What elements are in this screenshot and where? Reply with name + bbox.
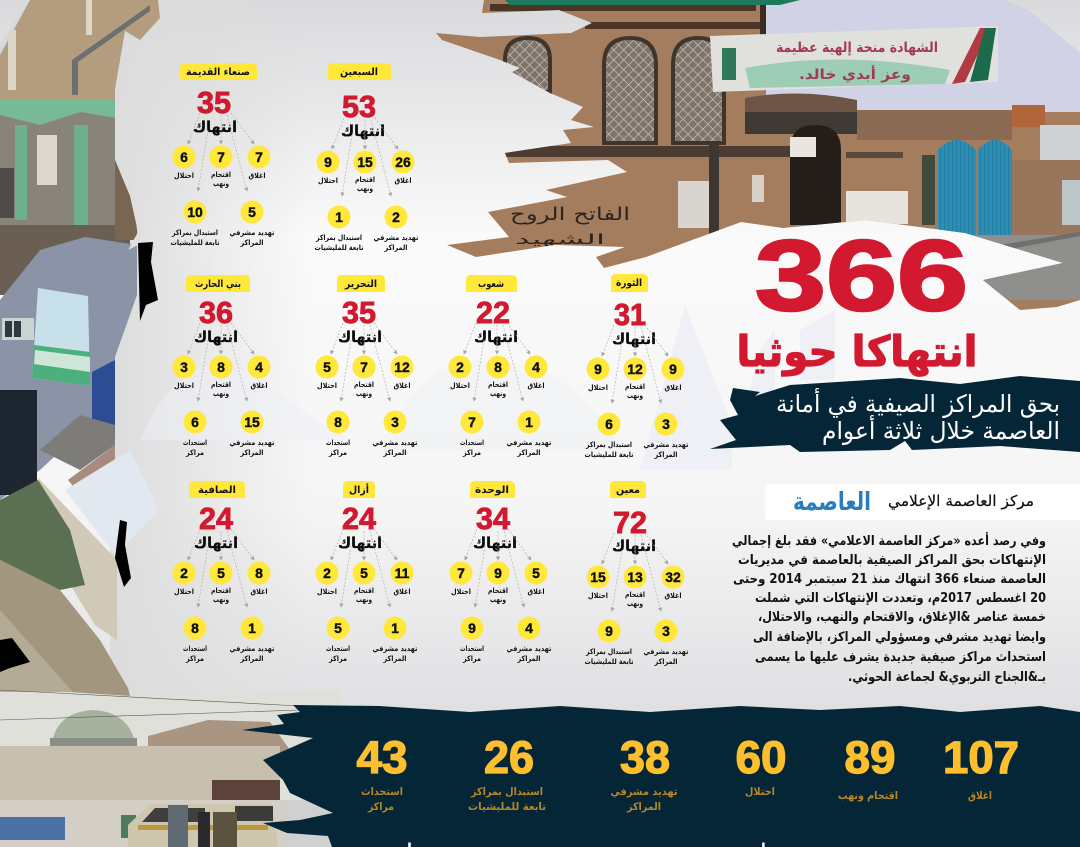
tree: 5	[532, 565, 540, 581]
stat: raid and looting	[838, 732, 898, 802]
tree: 10	[187, 204, 203, 220]
background watermark	[140, 305, 835, 470]
tree	[448, 323, 552, 457]
tree: استبدال بمراكز	[171, 228, 218, 237]
tree: 3	[391, 414, 399, 430]
tree: 7	[217, 149, 225, 165]
tree: المراكز	[240, 238, 264, 247]
heading: الوحدة	[475, 485, 509, 496]
tree: 8	[494, 359, 502, 375]
tree: مراكز	[185, 654, 204, 663]
background left shade	[110, 0, 310, 720]
tree: تهديد مشرفي	[372, 644, 418, 653]
tree: 6	[191, 414, 199, 430]
total: 22	[476, 295, 510, 330]
dark title band	[710, 376, 1080, 452]
tree: 2	[456, 359, 464, 375]
tree: اقتحام	[488, 586, 508, 595]
tree: ونهب	[213, 595, 229, 604]
tree: تهديد مشرفي	[230, 228, 275, 237]
stat: closure: اغلاق	[968, 790, 992, 802]
tree: مراكز	[328, 448, 347, 457]
tree	[584, 533, 689, 666]
tree: ونهب	[356, 389, 372, 398]
stat: new centres: استحداث	[361, 786, 403, 798]
tree: اغلاق	[248, 171, 266, 180]
tree: احتلال	[450, 381, 470, 390]
tree: اغلاق	[394, 176, 412, 185]
media centre name: مركز العاصمة الإعلامي	[888, 492, 1034, 511]
stat: new centres	[356, 732, 408, 813]
heading	[343, 481, 375, 498]
tree: ونهب	[356, 595, 372, 604]
body paragraph: بـ&الجناح التربوي& لجماعة الحوثي.	[848, 670, 1046, 685]
total: 31	[614, 297, 646, 332]
tree: استبدال بمراكز	[585, 440, 632, 449]
stat: raid and looting: 89	[844, 732, 896, 783]
tree: 1	[525, 414, 533, 430]
panel: Shuub	[448, 275, 552, 457]
tree: احتلال	[451, 587, 471, 596]
tree: المراكز	[517, 448, 540, 457]
bottom dark band	[242, 705, 1080, 847]
tree: تابعة للمليشيات	[314, 243, 364, 252]
photo: mosque bottom left	[0, 690, 340, 847]
tree	[172, 529, 275, 663]
tree: استبدال بمراكز	[585, 647, 632, 656]
tree: تهديد مشرفي	[644, 647, 689, 656]
tree: احتلال	[174, 381, 194, 390]
tree: 9	[669, 361, 677, 377]
tree: ونهب	[213, 389, 229, 398]
tree: 5	[217, 565, 225, 581]
tree: ونهب	[490, 389, 506, 398]
tree: 4	[532, 359, 540, 375]
stat: threats to supervisors	[610, 732, 678, 813]
tree: 1	[391, 620, 399, 636]
heading: الصافية	[198, 485, 236, 496]
tree: المراكز	[384, 243, 408, 252]
tree: مراكز	[185, 448, 204, 457]
body paragraph	[732, 532, 1046, 685]
torn black edges	[0, 242, 158, 672]
body paragraph: استحداث مراكز صيفية جديدة يشرف عليها ما يسمى	[755, 650, 1046, 665]
tree: ونهب	[490, 595, 506, 604]
total: 36	[199, 295, 233, 330]
tree: احتلال	[588, 383, 608, 392]
stat: occupation: احتلال	[745, 786, 775, 798]
panel: Al-Sabeen	[314, 63, 419, 252]
tree: 32	[665, 569, 681, 585]
caption: انتهاك	[612, 330, 656, 348]
tree: استحداث	[183, 644, 207, 653]
caption: انتهاك	[193, 118, 237, 136]
heading: أزال	[349, 483, 369, 496]
tree: 13	[627, 569, 643, 585]
stat: threats to supervisors: 38	[620, 732, 670, 783]
stat: replacement with militia centres	[468, 732, 546, 813]
panel: Al-Safia	[172, 481, 275, 663]
panel: Old Sanaa	[170, 63, 275, 247]
heading: معين	[616, 485, 640, 496]
tree: المراكز	[240, 654, 264, 663]
tree: المراكز	[654, 657, 678, 666]
heading	[466, 275, 517, 292]
heading: التحرير	[344, 279, 377, 290]
tree: المراكز	[240, 448, 264, 457]
tree: اقتحام	[625, 590, 645, 599]
panel: Maeen	[584, 481, 689, 666]
tree: تهديد مشرفي	[372, 438, 418, 447]
tree: المراكز	[517, 654, 540, 663]
tree: ونهب	[213, 179, 229, 188]
tree	[316, 323, 418, 457]
title: violations: انتهاكا حوثيا	[736, 327, 978, 377]
tree: اغلاق	[664, 383, 682, 392]
heading	[611, 274, 648, 292]
caption: انتهاك	[338, 534, 382, 552]
tree: 6	[605, 416, 613, 432]
stat: replacement with militia centres: تابعة للمليشيات	[468, 801, 546, 813]
heading	[186, 275, 250, 292]
caption: انتهاك	[194, 328, 238, 346]
tree: اغلاق	[528, 381, 544, 390]
tree: تابعة للمليشيات	[584, 450, 634, 459]
tree: احتلال	[174, 587, 194, 596]
tree: تابعة للمليشيات	[584, 657, 634, 666]
tree: اقتحام	[211, 170, 231, 179]
tree: احتلال	[318, 176, 338, 185]
tree: 7	[457, 565, 465, 581]
graffiti: الفاتح الروح	[510, 204, 630, 225]
tree: 2	[323, 565, 331, 581]
banner in photo: الشهادة منحة إلهية عظيمة	[776, 40, 938, 56]
panel: Al-Thawra	[584, 274, 689, 459]
tree: 2	[180, 565, 188, 581]
tree: استحداث	[326, 644, 350, 653]
tree: المراكز	[654, 450, 678, 459]
tree: استبدال بمراكز	[315, 233, 362, 242]
tree: 7	[360, 359, 368, 375]
stat: threats to supervisors: المراكز	[626, 801, 661, 813]
tree: 7	[468, 414, 476, 430]
tree: 5	[323, 359, 331, 375]
heading	[610, 481, 646, 498]
stat: new centres: مراكز	[367, 801, 394, 813]
logo: Al-Asima: العاصمة	[793, 487, 871, 516]
tree: 4	[525, 620, 533, 636]
main number 366: 366	[755, 220, 968, 332]
panel: Al-Wahda	[450, 481, 552, 663]
heading	[470, 481, 515, 498]
heading	[189, 481, 245, 498]
tree: 12	[394, 359, 410, 375]
tree: 6	[180, 149, 188, 165]
tree: اقتحام	[625, 382, 645, 391]
tree: المراكز	[383, 448, 406, 457]
tree: احتلال	[174, 171, 194, 180]
tree: مراكز	[462, 654, 481, 663]
tree: 3	[662, 623, 670, 639]
total: 34	[476, 501, 511, 536]
tree: 8	[334, 414, 342, 430]
tree: 5	[334, 620, 342, 636]
caption: انتهاك	[473, 534, 517, 552]
panel: Azal	[316, 481, 418, 663]
tree: 3	[180, 359, 188, 375]
tree: المراكز	[383, 654, 406, 663]
tree: تهديد مشرفي	[230, 644, 275, 653]
tree: تهديد مشرفي	[374, 233, 419, 242]
body paragraph: الإنتهاكات بحق المراكز الصيفية بالعاصمة في مديريات	[738, 553, 1046, 568]
tree: اغلاق	[394, 587, 410, 596]
banner in photo	[710, 26, 998, 92]
tree	[316, 529, 418, 663]
tree: اقتحام	[211, 586, 231, 595]
tree: اغلاق	[250, 587, 268, 596]
tree: 8	[255, 565, 263, 581]
tree: 9	[494, 565, 502, 581]
tree: استحداث	[326, 438, 350, 447]
tree: 5	[360, 565, 368, 581]
tree: اغلاق	[250, 381, 268, 390]
tree: 7	[255, 149, 263, 165]
tree: 15	[244, 414, 260, 430]
window lattice	[505, 38, 724, 143]
caption: انتهاك	[338, 328, 382, 346]
photo: left collage	[0, 0, 170, 700]
tree: اغلاق	[394, 381, 410, 390]
tree: ونهب	[357, 184, 373, 193]
tree: 3	[662, 416, 670, 432]
tree	[450, 529, 552, 663]
stat: raid and looting: اقتحام ونهب	[838, 790, 898, 802]
tree: اقتحام	[355, 175, 375, 184]
tree: احتلال	[317, 381, 337, 390]
tree: 9	[605, 623, 613, 639]
total: 24	[199, 501, 234, 536]
tree: 8	[217, 359, 225, 375]
banner in photo: وعز أبدي خالد.	[799, 65, 911, 84]
tree: 1	[248, 620, 256, 636]
tree: 26	[395, 154, 411, 170]
tree: 1	[335, 209, 343, 225]
tree: 9	[468, 620, 476, 636]
total: 72	[613, 505, 647, 540]
tree: 5	[248, 204, 256, 220]
tree: 8	[191, 620, 199, 636]
total: 35	[197, 85, 231, 120]
tree: 15	[590, 569, 606, 585]
tree: اقتحام	[488, 380, 508, 389]
caption: انتهاك	[194, 534, 238, 552]
tree: ونهب	[627, 391, 643, 400]
tree	[584, 325, 689, 459]
body paragraph: 20 اغسطس 2017م، وتعددت الإنتهاكات التي شملت	[755, 591, 1046, 606]
heading: شعوب	[478, 279, 504, 290]
tree: 9	[594, 361, 602, 377]
tree: استحداث	[460, 438, 484, 447]
tree: تهديد مشرفي	[644, 440, 689, 449]
panel: Bani Al-Harith	[172, 275, 275, 457]
total: 24	[342, 501, 377, 536]
heading: بني الحارث	[195, 279, 241, 290]
tree: احتلال	[588, 591, 608, 600]
subtitle: العاصمة خلال ثلاثة أعوام	[822, 415, 1060, 445]
stat: occupation: 60	[736, 732, 786, 783]
heading: السبعين	[340, 67, 378, 78]
photo: school building top right: الشهيد	[515, 232, 605, 248]
tree: 2	[392, 209, 400, 225]
stat: closure: 107	[943, 732, 1019, 783]
tree	[172, 323, 275, 457]
tree: اقتحام	[354, 380, 374, 389]
tree: تهديد مشرفي	[230, 438, 275, 447]
tree: مراكز	[462, 448, 481, 457]
heading	[328, 63, 391, 80]
body paragraph: العاصمة صنعاء 366 انتهاك منذ 21 سبتمبر 2014 وحتى	[733, 572, 1046, 587]
tree: 15	[357, 154, 373, 170]
tree: تابعة للمليشيات	[170, 238, 220, 247]
tree	[314, 118, 419, 252]
heading: الثورة	[616, 278, 642, 289]
tree: اغلاق	[664, 591, 682, 600]
heading	[337, 275, 385, 292]
total: 35	[342, 295, 376, 330]
heading: صنعاء القديمة	[186, 67, 250, 78]
white header behind logo	[765, 484, 1080, 520]
tree	[170, 113, 275, 247]
subtitle: بحق المراكز الصيفية في أمانة	[776, 388, 1060, 418]
heading	[180, 63, 257, 80]
panel: Al-Tahrir	[316, 275, 418, 457]
caption: انتهاك	[341, 122, 385, 140]
tree: احتلال	[317, 587, 337, 596]
tree: تهديد مشرفي	[506, 644, 552, 653]
caption: انتهاك	[612, 537, 656, 555]
tree: اقتحام	[211, 380, 231, 389]
stat: new centres: 43	[356, 732, 408, 783]
stat: threats to supervisors: تهديد مشرفي	[610, 786, 678, 798]
tree: اقتحام	[354, 586, 374, 595]
tree: مراكز	[328, 654, 347, 663]
tree: 4	[255, 359, 263, 375]
tree: 12	[627, 361, 643, 377]
tree: 9	[324, 154, 332, 170]
subtitle	[776, 388, 1060, 445]
tree: تهديد مشرفي	[506, 438, 552, 447]
tree: ونهب	[627, 599, 643, 608]
photo: school building top right	[430, 0, 1080, 320]
tree: اغلاق	[528, 587, 544, 596]
tree: استحداث	[183, 438, 207, 447]
stat: replacement with militia centres: استبدال بمراكز	[470, 786, 543, 798]
stat: replacement with militia centres: 26	[484, 732, 534, 783]
tree: استحداث	[460, 644, 484, 653]
caption: انتهاك	[474, 328, 518, 346]
total: 53	[342, 89, 376, 124]
tree: 11	[395, 565, 410, 581]
clipped footer text	[394, 841, 775, 847]
